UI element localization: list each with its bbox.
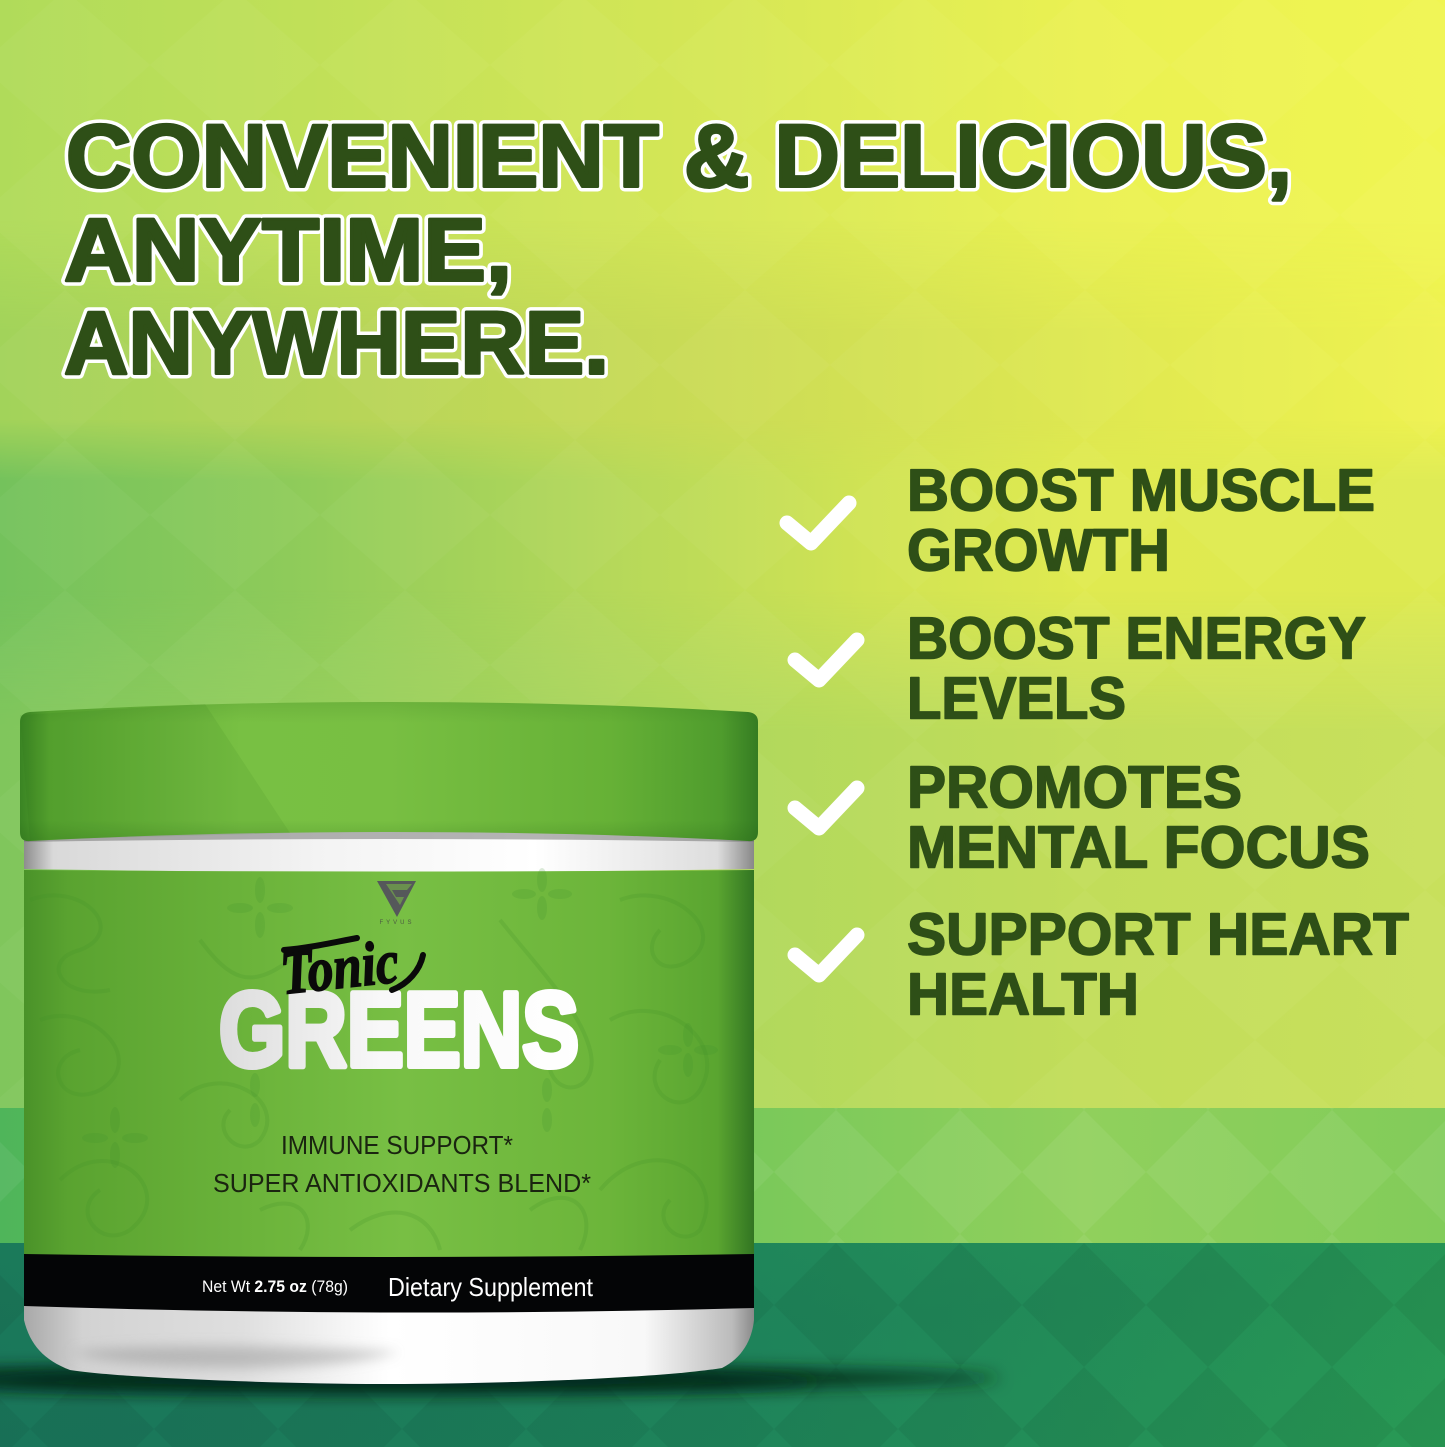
benefit list — [787, 458, 1409, 1028]
label claims: SUPER ANTIOXIDANTS BLEND* — [213, 1168, 591, 1198]
label claims: IMMUNE SUPPORT* — [281, 1130, 513, 1160]
title: CONVENIENT & DELICIOUS, — [66, 106, 1292, 206]
product name — [219, 928, 579, 1089]
benefit: support heart health: SUPPORT HEART — [907, 902, 1409, 968]
jar neck — [24, 832, 754, 872]
product name: GREENS — [219, 971, 579, 1089]
brand logo: FYVUS — [379, 920, 415, 926]
benefit: support heart health: HEALTH — [907, 962, 1139, 1028]
jar lid — [20, 702, 758, 841]
benefit: promotes mental focus: MENTAL FOCUS — [907, 814, 1370, 880]
product jar — [20, 702, 758, 1384]
title — [64, 106, 1292, 392]
product name: Tonic — [277, 928, 402, 1008]
benefit: promotes mental focus — [795, 754, 1370, 880]
jar label — [24, 870, 754, 1258]
title: CONVENIENT & DELICIOUS, — [66, 106, 1292, 206]
jar base — [24, 1305, 754, 1384]
title: ANYTIME, — [64, 200, 512, 300]
title: ANYTIME, — [64, 200, 512, 300]
benefit: boost muscle growth — [787, 458, 1375, 584]
title: ANYWHERE. — [64, 292, 609, 392]
title: ANYWHERE. — [64, 292, 609, 392]
label claims — [213, 1130, 591, 1198]
benefit: boost energy levels: LEVELS — [907, 666, 1126, 732]
black label band — [24, 1254, 754, 1313]
benefit: support heart health — [795, 902, 1409, 1028]
benefit: boost energy levels — [795, 606, 1366, 732]
benefit: boost muscle growth: GROWTH — [907, 518, 1170, 584]
black label band: Dietary Supplement — [388, 1272, 594, 1302]
benefit: boost energy levels: BOOST ENERGY — [907, 606, 1366, 672]
benefit: boost muscle growth: BOOST MUSCLE — [907, 458, 1375, 524]
black label band: Net Wt 2.75 oz (78g) — [202, 1277, 348, 1296]
label ornaments — [30, 895, 707, 1250]
benefit: promotes mental focus: PROMOTES — [907, 754, 1242, 820]
floor shadow — [0, 1366, 1000, 1393]
brand logo — [377, 881, 416, 926]
